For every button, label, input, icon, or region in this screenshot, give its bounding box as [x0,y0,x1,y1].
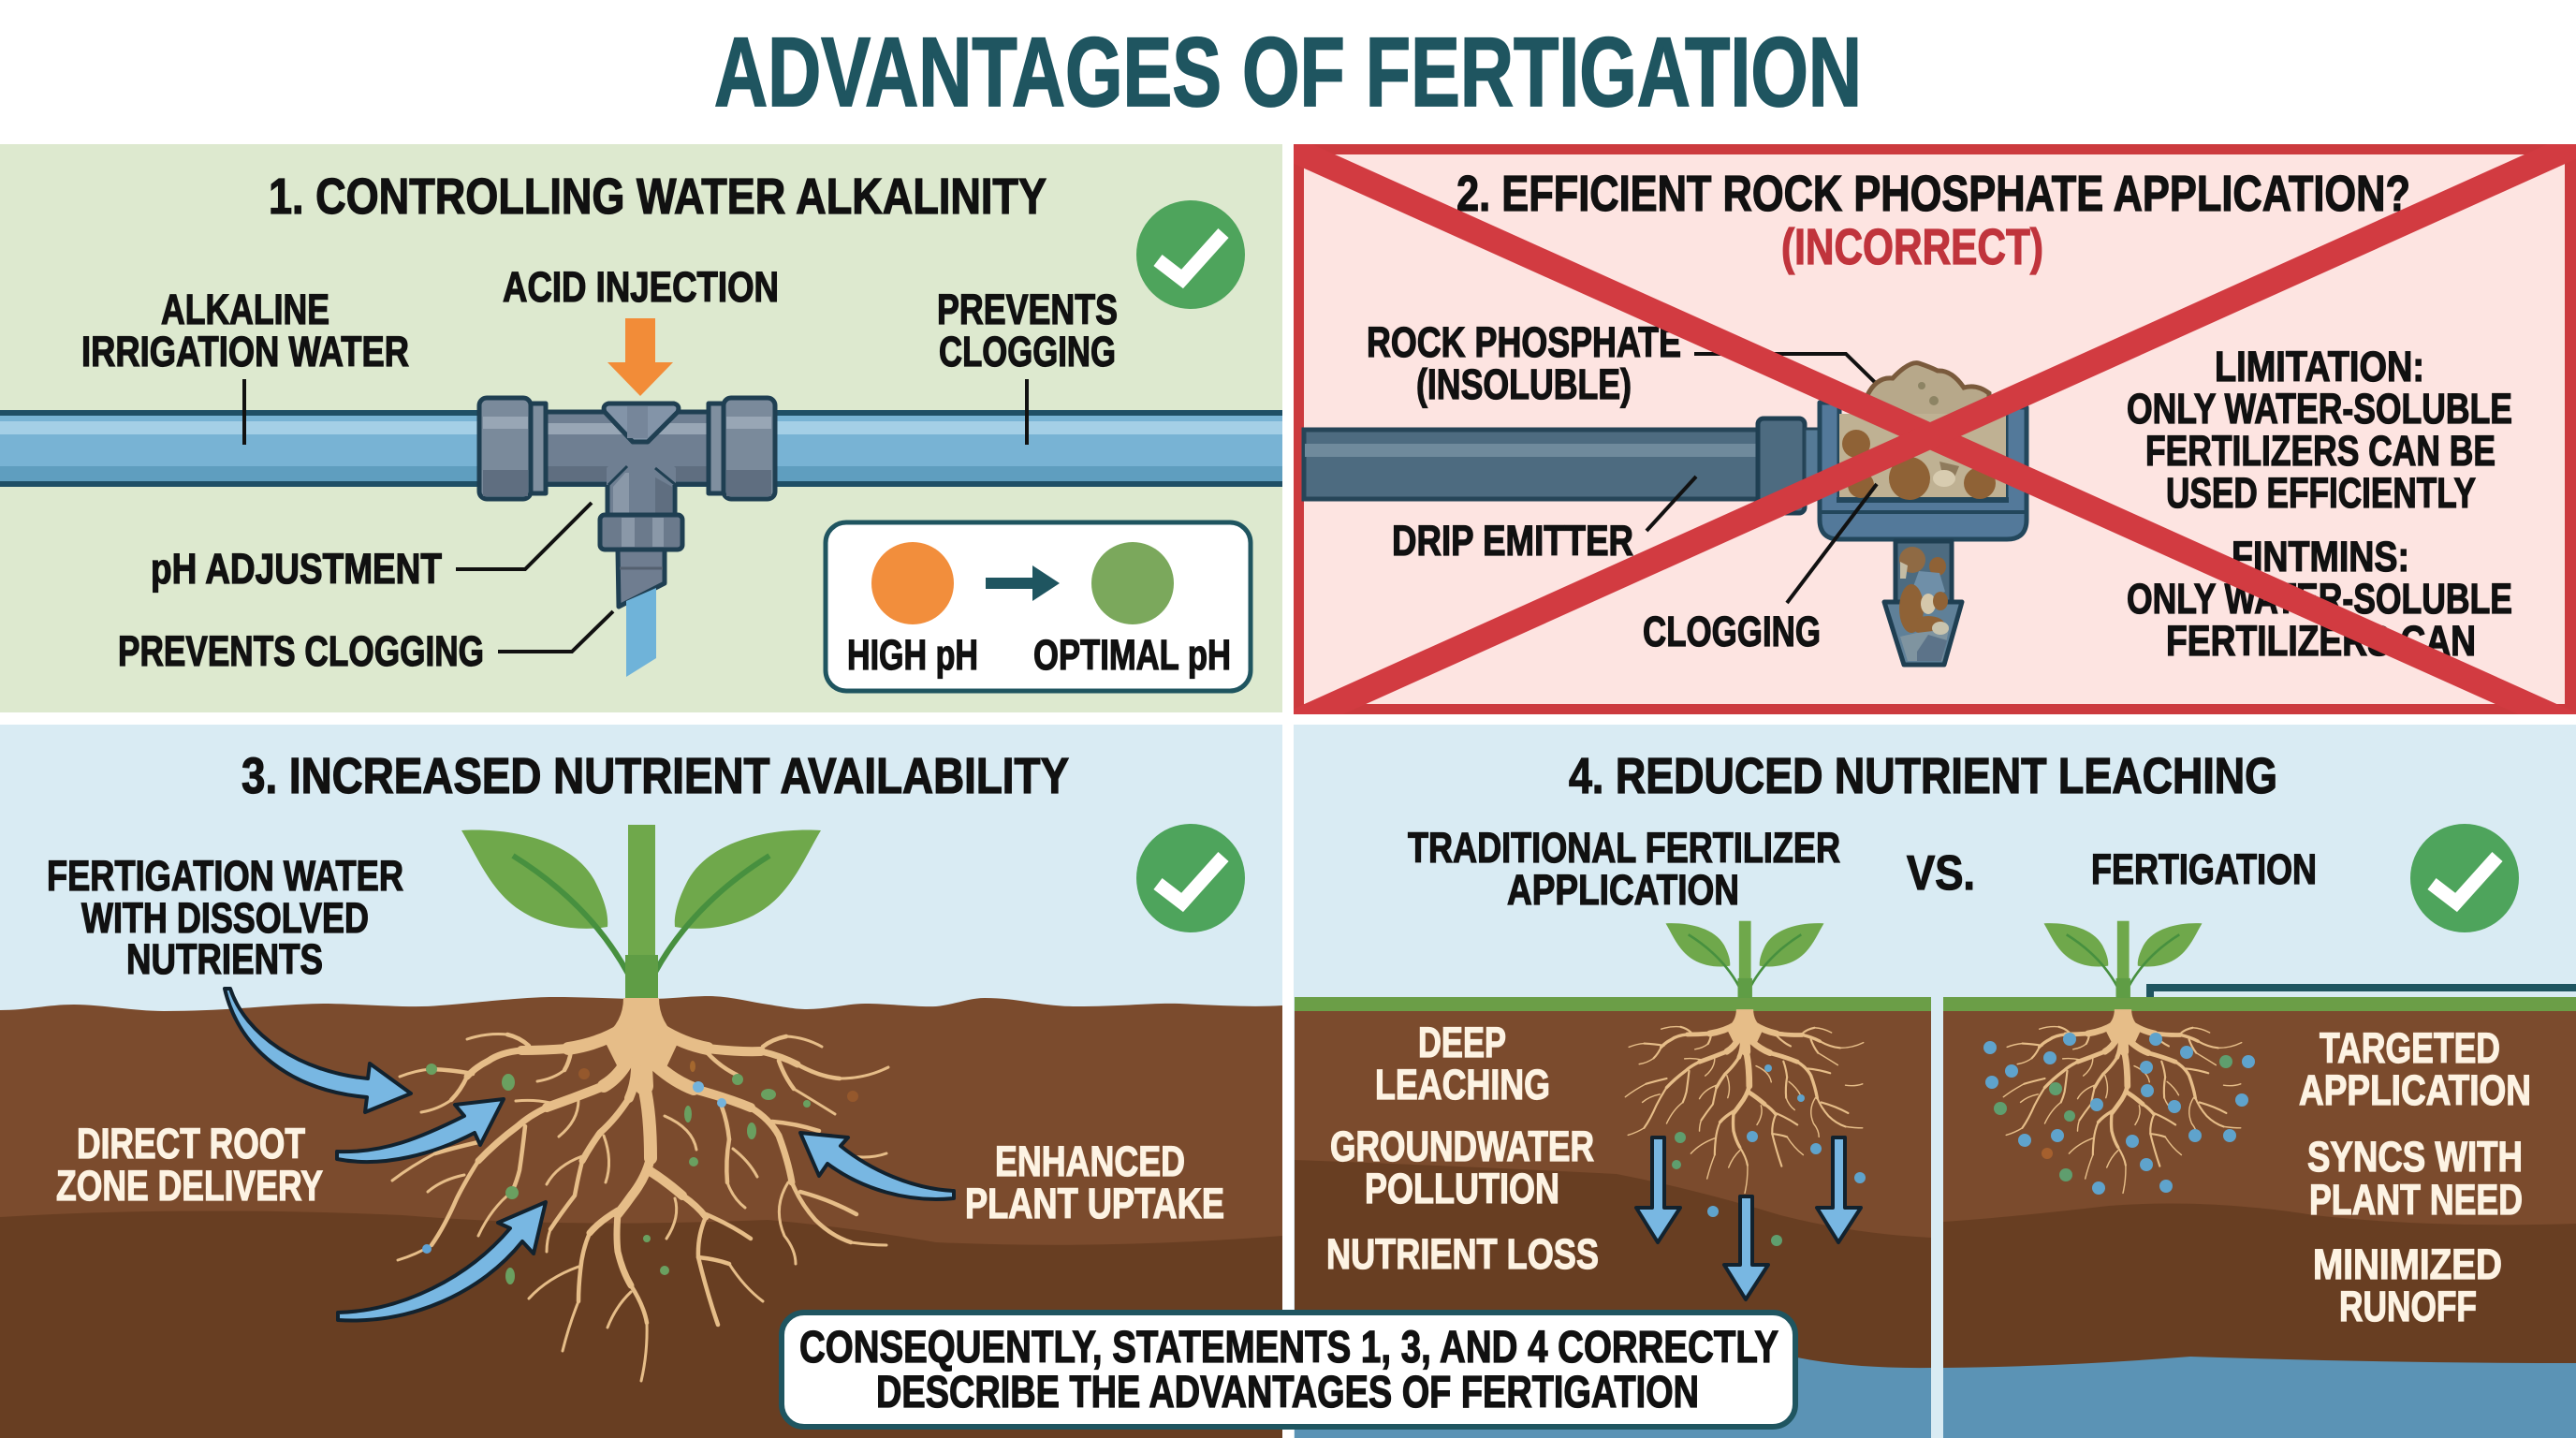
label: fertigation water: NUTRIENTS [126,935,323,983]
label: rock phosphate [1367,318,1890,408]
comparison heading: fertigation: FERTIGATION [2091,845,2317,893]
callout: conclusion [782,1313,1795,1427]
label: prevents clogging right: CLOGGING [939,328,1116,375]
labels: traditional problems: LEACHING [1375,1061,1550,1108]
T fitting [479,398,775,607]
plant shoot [461,825,821,1000]
label: direct root zone delivery: DIRECT ROOT [77,1120,305,1167]
soil section: traditional [1295,997,1931,1438]
incorrect tag: (INCORRECT) [1781,219,2043,275]
label: alkaline irrigation water [81,286,409,375]
roots: fertigation [2003,1009,2242,1193]
labels: fertigation benefits [2299,1024,2531,1330]
labels: fertigation benefits: RUNOFF [2339,1283,2477,1330]
text block: limitation: USED EFFICIENTLY [2166,469,2476,517]
water stream [626,588,656,677]
nutrient dots: fertigation [1983,1033,2255,1195]
heading 4: 4. REDUCED NUTRIENT LEACHING [1569,748,2277,804]
leaching arrow 1 [1636,1137,1680,1242]
text block: limitation: LIMITATION: [2215,343,2424,390]
label: clogging: CLOGGING [1643,608,1821,655]
label: drip emitter [1392,477,1696,565]
panel: 4 reduced nutrient leaching [1294,725,2576,1438]
heading 3: 3. INCREASED NUTRIENT AVAILABILITY [242,748,1069,804]
labels: traditional problems: POLLUTION [1365,1165,1559,1212]
drip pipe [1304,418,1820,513]
labels: traditional problems [1326,1019,1599,1278]
label: alkaline irrigation water: ALKALINE [161,286,329,333]
labels: traditional problems: GROUNDWATER [1330,1123,1594,1170]
clogged emitter [1884,541,1962,665]
label: prevents clogging bottom: PREVENTS CLOGGING [118,627,484,675]
VS: VS. [1907,846,1975,901]
label: enhanced plant uptake [965,1137,1224,1227]
plant: traditional [1666,921,1823,998]
title: ADVANTAGES OF FERTIGATION [714,18,1862,127]
panel: 1 controlling water alkalinity [0,144,1282,712]
label: alkaline irrigation water: IRRIGATION WATER [81,328,409,375]
nutrient particles [422,1061,858,1284]
text block: fintmins: FINTMINS: [2232,533,2409,580]
labels: traditional problems: NUTRIENT LOSS [1326,1230,1599,1278]
leaching arrow 3 [1724,1196,1768,1299]
leaching arrows [1636,1137,1861,1299]
labels: fertigation benefits: TARGETED [2320,1024,2500,1072]
filter box with rock phosphate [1820,363,2027,539]
icon: check 3 [1136,824,1245,932]
icon: check 1 [1136,200,1245,309]
optimal pH circle [1091,542,1174,624]
label: prevents clogging right [937,286,1118,375]
labels: traditional problems: DEEP [1418,1019,1506,1066]
comparison heading: traditional: APPLICATION [1507,866,1739,914]
soil section: fertigation [1943,997,2576,1438]
plant: fertigation [2044,921,2202,998]
arrow 3 [338,1202,546,1320]
legend label high pH: HIGH pH [847,631,978,679]
label: fertigation water [47,852,403,983]
text block: limitation [2127,343,2512,517]
label: direct root zone delivery [56,1120,323,1210]
label: rock phosphate: (INSOLUBLE) [1416,360,1632,408]
soil [0,996,1282,1438]
labels: fertigation benefits: SYNCS WITH [2307,1133,2523,1181]
arrow 2 [337,1099,504,1162]
label: prevents clogging right: PREVENTS [937,286,1118,333]
text block: fintmins: FERTILIZERS CAN [2166,617,2476,665]
arrows into root zone [225,989,954,1320]
comparison heading: traditional: TRADITIONAL FERTILIZER [1408,824,1840,872]
label: drip emitter: DRIP EMITTER [1392,517,1633,565]
labels: fertigation benefits: PLANT NEED [2309,1176,2523,1224]
legend arrow [986,565,1060,601]
label: acid injection: ACID INJECTION [503,263,779,311]
label: fertigation water: FERTIGATION WATER [47,852,403,900]
comparison heading: traditional [1408,824,1840,914]
callout: conclusion: CONSEQUENTLY, STATEMENTS 1, 3, AND 4 CORRECTLY [799,1323,1778,1372]
pipe [0,410,1282,487]
labels: fertigation benefits: APPLICATION [2299,1066,2531,1114]
nutrient dots: traditional [1672,1064,1866,1246]
label: rock phosphate: ROCK PHOSPHATE [1367,318,1681,366]
label: enhanced plant uptake: ENHANCED [995,1137,1185,1185]
leader lines top [244,379,1027,445]
label: enhanced plant uptake: PLANT UPTAKE [965,1180,1224,1227]
label: fertigation water: WITH DISSOLVED [81,894,369,942]
label: pH adjustment [151,503,592,593]
panel: 2 rock phosphate incorrect [1294,144,2576,726]
arrow 1 [225,989,411,1112]
panel: 3 increased nutrient availability [0,725,1282,1438]
irrigation line [2150,988,2576,998]
legend: pH change [826,522,1251,691]
legend label optimal pH: OPTIMAL pH [1033,631,1231,679]
label: clogging [1643,484,1877,655]
heading 1: 1. CONTROLLING WATER ALKALINITY [269,169,1046,225]
roots [392,998,888,1381]
callout: conclusion: DESCRIBE THE ADVANTAGES OF FERTIGATION [876,1368,1699,1417]
text block: fintmins [2127,533,2512,665]
high pH circle [871,542,954,624]
red X [1294,145,2576,726]
label: direct root zone delivery: ZONE DELIVERY [56,1162,323,1210]
label: pH adjustment: pH ADJUSTMENT [151,545,442,593]
icon: check 4 [2410,824,2519,932]
labels: fertigation benefits: MINIMIZED [2313,1240,2502,1288]
leaching arrow 2 [1817,1137,1861,1242]
arrow 4 [800,1133,954,1199]
icon: acid arrow [607,318,673,396]
roots: traditional [1625,1009,1864,1193]
